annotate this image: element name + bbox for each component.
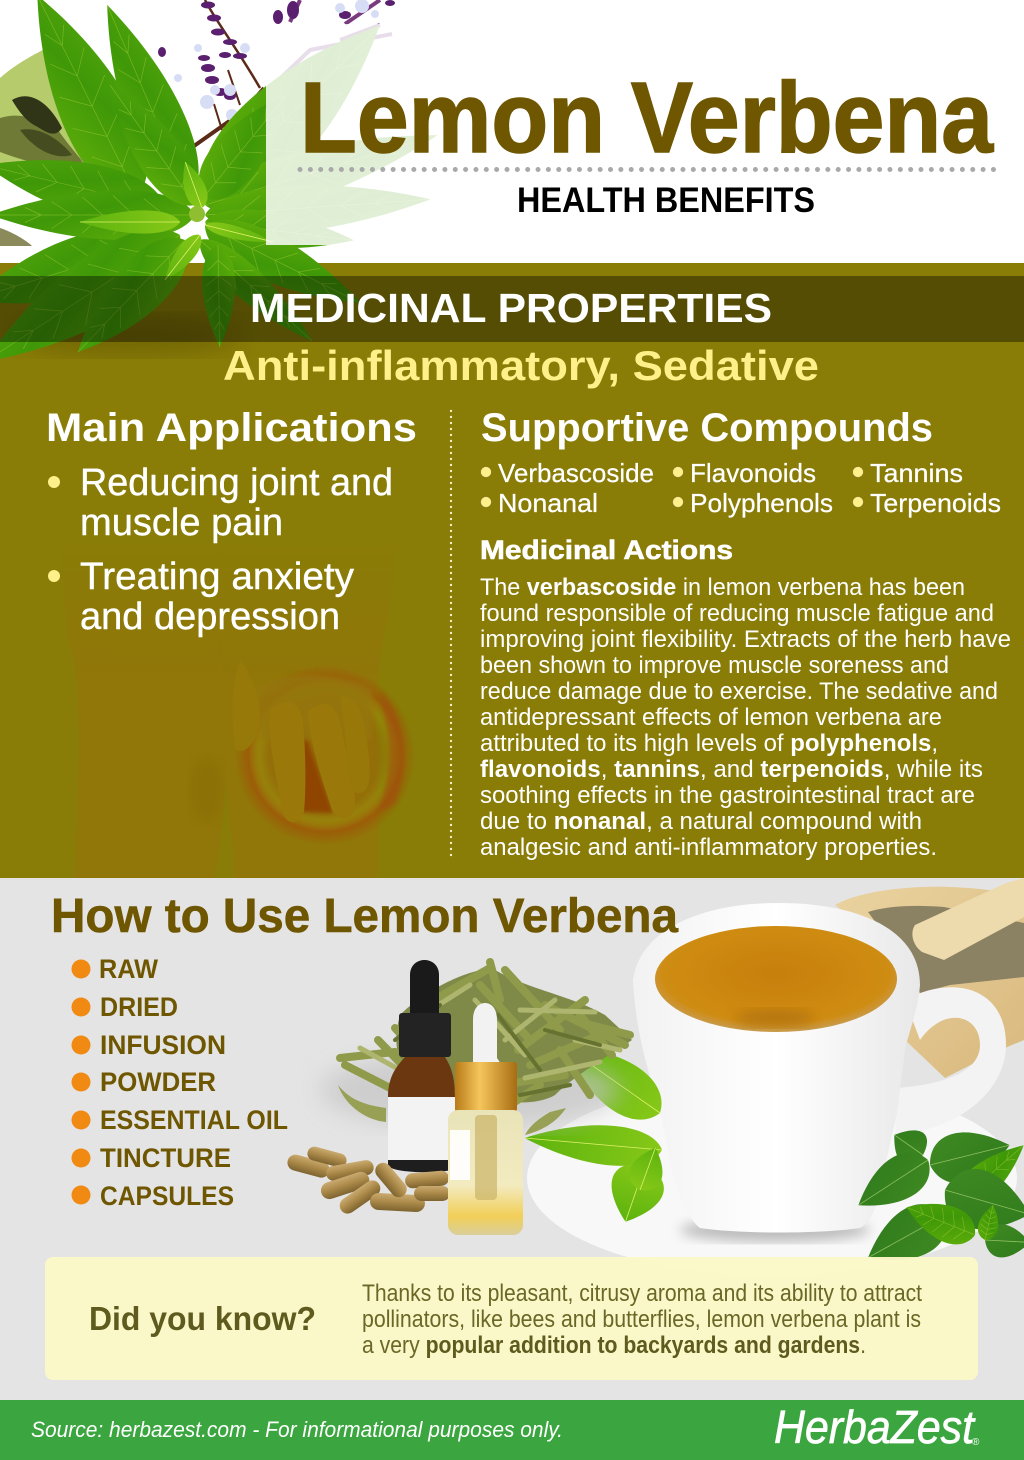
compound list: [481, 458, 1001, 518]
panel: how to use: [51, 890, 678, 1211]
illustration: capsules: [286, 1145, 450, 1217]
subheading: medicinal actions: Medicinal Actions: [480, 535, 733, 565]
panel: did you know: [45, 1257, 978, 1380]
paragraph: medicinal actions: The verbascoside in lemon verbena has been: [480, 574, 965, 601]
illustration: dried herb pile: [320, 962, 632, 1135]
paragraph: medicinal actions: flavonoids, tannins, and terpenoids, while its: [480, 756, 983, 783]
paragraph: medicinal actions: been shown to improve muscle soreness and: [480, 652, 949, 679]
footer: [0, 1400, 1024, 1460]
panel: supportive compounds: [480, 406, 1011, 861]
icon: lilac flower sprigs: [158, 0, 395, 146]
bullet: joint pain: muscle pain: [80, 502, 283, 544]
usage list: DRIED: [100, 992, 178, 1022]
paragraph: medicinal actions: analgesic and anti-inflammatory properties.: [480, 834, 937, 861]
panel: how to use background: [0, 878, 1024, 1400]
heading band: medicinal properties: [0, 276, 1024, 342]
fact text: Thanks to its pleasant, citrusy aroma and its ability to attract: [362, 1280, 922, 1307]
icon: dried verbena leaves: [0, 46, 135, 246]
compound list: Terpenoids: [870, 488, 1001, 518]
bullet: joint pain: Reducing joint and: [80, 462, 393, 504]
bullet: anxiety: and depression: [80, 596, 340, 638]
bullet: joint pain: [48, 462, 393, 544]
paragraph: medicinal actions: due to nonanal, a natural compound with: [480, 808, 922, 835]
usage list: [72, 954, 288, 1211]
compound list: Tannins: [870, 458, 963, 488]
fact text: a very popular addition to backyards and gardens.: [362, 1332, 866, 1359]
paragraph: medicinal actions: soothing effects in the gastrointestinal tract are: [480, 782, 975, 809]
tea surface: [655, 926, 897, 1032]
compound list: Polyphenols: [690, 488, 833, 518]
illustration: dark dropper bottle: [388, 960, 455, 1172]
bullet: anxiety: Treating anxiety: [80, 556, 354, 598]
subheading: properties list: Anti-inflammatory, Sedative: [223, 342, 819, 389]
source note: Source: herbazest.com - For informational purposes only.: [31, 1417, 563, 1442]
saucer: [527, 1080, 1017, 1276]
subtitle: HEALTH BENEFITS: [517, 181, 815, 220]
heading: how to use: How to Use Lemon Verbena: [51, 890, 678, 943]
title: Lemon Verbena: [300, 62, 994, 174]
compound list: Nonanal: [498, 488, 598, 518]
usage list: TINCTURE: [100, 1143, 231, 1173]
dotted divider: [300, 167, 996, 172]
title block: [300, 62, 996, 220]
cup handle: [895, 987, 1006, 1135]
compound list: Flavonoids: [690, 458, 816, 488]
paragraph: medicinal actions: improving joint flexibility. Extracts of the herb have: [480, 626, 1011, 653]
vertical dotted divider: [450, 411, 452, 858]
heading: medicinal properties: MEDICINAL PROPERTIES: [250, 285, 772, 331]
panel: main applications: [46, 406, 417, 638]
cup body: [633, 903, 920, 1232]
heading: main applications: Main Applications: [46, 406, 417, 450]
paragraph: medicinal actions: found responsible of reducing muscle fatigue and: [480, 600, 994, 627]
fact text: pollinators, like bees and butterflies, lemon verbena plant is: [362, 1306, 921, 1333]
translucent white header panel: [266, 24, 1024, 245]
usage list: INFUSION: [100, 1030, 226, 1060]
usage list: ESSENTIAL OIL: [100, 1105, 288, 1135]
paragraph: medicinal actions: [480, 574, 1011, 861]
paragraph: medicinal actions: attributed to its high levels of polyphenols,: [480, 730, 938, 757]
illustration: tea cup on saucer: [527, 903, 1017, 1276]
illustration: knee with pain highlight: [60, 540, 415, 878]
registered mark: ®: [972, 1437, 980, 1448]
panel: medicinal properties background: [0, 263, 1024, 878]
usage list: RAW: [99, 954, 158, 984]
heading: did you know: Did you know?: [89, 1300, 316, 1337]
paragraph: medicinal actions: antidepressant effects of lemon verbena are: [480, 704, 942, 731]
fact text: [362, 1280, 922, 1359]
illustration: golden oil bottle: [448, 1003, 523, 1235]
usage list: POWDER: [100, 1067, 216, 1097]
bullet: anxiety: [48, 556, 354, 638]
paragraph: medicinal actions: reduce damage due to exercise. The sedative and: [480, 678, 998, 705]
compound list: Verbascoside: [498, 458, 654, 488]
illustration: mortar with powder: [835, 878, 1024, 1078]
icon: mint leaves on saucer: [523, 1026, 1024, 1279]
logo: HerbaZest: HerbaZest: [774, 1401, 976, 1453]
usage list: CAPSULES: [100, 1181, 234, 1211]
illustration: verbena plant leaves: [0, 0, 445, 390]
heading: supportive compounds: Supportive Compounds: [481, 406, 933, 450]
